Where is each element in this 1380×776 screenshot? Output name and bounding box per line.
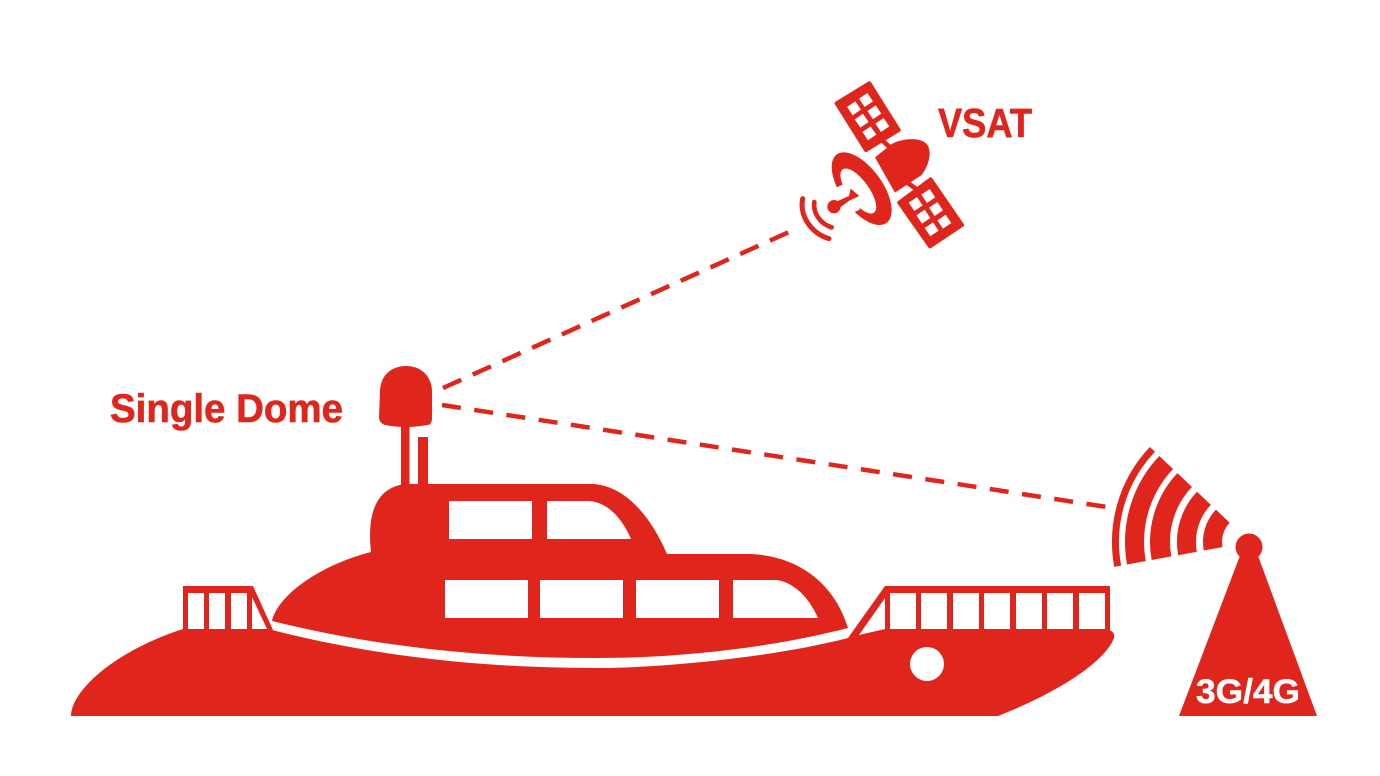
label: Single Dome: Single Dome [110, 387, 343, 431]
upper cabin windows [449, 501, 631, 539]
stern railing [183, 586, 273, 630]
masts [401, 425, 428, 487]
signal arcs [802, 199, 832, 239]
dome antenna [379, 366, 432, 427]
satellite dish [820, 142, 903, 235]
dish feed [834, 189, 859, 210]
lower panel cells [909, 189, 951, 236]
satellite body [875, 139, 930, 193]
bow railing [848, 586, 1110, 638]
ship hull [71, 629, 1114, 716]
label: VSAT: VSAT [938, 100, 1032, 146]
dashed link: dome to cell tower [442, 405, 1107, 507]
ship [71, 366, 1114, 716]
porthole [910, 647, 944, 681]
lower cabin windows [445, 580, 818, 618]
upper solar panel [837, 83, 899, 150]
cell tower [1179, 534, 1317, 716]
label: 3G/4G: 3G/4G [1196, 673, 1300, 711]
satellite icon [802, 83, 962, 246]
panel connectors [883, 141, 917, 189]
dashed link: dome to satellite [443, 232, 789, 388]
upper panel cells [847, 93, 889, 140]
lower solar panel [899, 179, 962, 246]
signal wave bands [1115, 449, 1223, 566]
ship cabin [272, 484, 848, 658]
